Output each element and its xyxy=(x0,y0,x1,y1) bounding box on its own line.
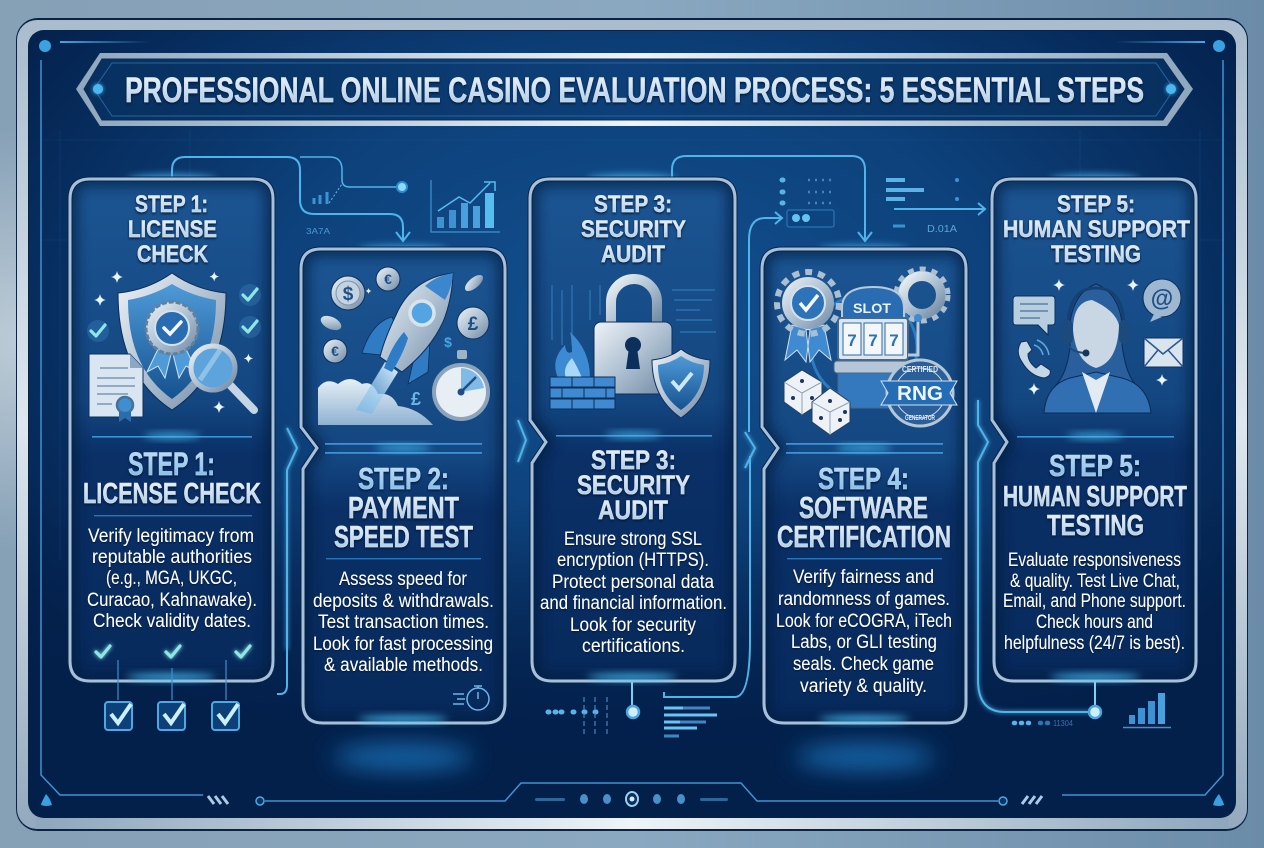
connector: step 3 to step 4 xyxy=(664,156,872,697)
heading top: SECURITY xyxy=(581,216,686,243)
card 4: software certification xyxy=(762,246,966,723)
heading bottom: STEP 1: xyxy=(128,446,215,482)
description: Protect personal data xyxy=(552,572,714,593)
heading bottom: LICENSE CHECK xyxy=(83,478,261,510)
heading top: CHECK xyxy=(137,241,209,268)
heading bottom xyxy=(1003,448,1187,542)
card 5: human support testing xyxy=(992,175,1196,681)
chart: rising bars xyxy=(431,180,500,232)
description: variety & quality. xyxy=(800,676,927,697)
description: Check validity dates. xyxy=(93,611,251,632)
heading top xyxy=(1003,191,1190,268)
description: encryption (HTTPS). xyxy=(557,550,709,571)
icon: gears, slot machine, dice and RNG seal: 7 xyxy=(868,331,878,350)
description: randomness of games. xyxy=(778,589,950,610)
card 1: license check xyxy=(70,175,273,681)
icon: three glowing checks xyxy=(96,646,250,657)
icon: gears, slot machine, dice and RNG seal: CERTIFIED xyxy=(902,365,938,374)
description xyxy=(776,567,952,697)
icon: gears, slot machine, dice and RNG seal xyxy=(777,269,957,435)
heading xyxy=(334,461,473,554)
icon: small stopwatch xyxy=(453,686,489,710)
heading bottom: HUMAN SUPPORT xyxy=(1003,481,1187,513)
heading: PAYMENT xyxy=(348,490,459,525)
description: Evaluate responsiveness xyxy=(1008,550,1181,571)
icon: support agent with chat, phone, email xyxy=(1013,279,1183,413)
heading top xyxy=(128,191,217,268)
description: seals. Check game xyxy=(793,654,934,675)
heading: STEP 4: xyxy=(818,461,909,496)
description: and financial information. xyxy=(540,593,727,614)
heading: SPEED TEST xyxy=(334,519,473,554)
heading top: LICENSE xyxy=(128,216,217,243)
heading top: STEP 5: xyxy=(1057,191,1135,218)
data dots and module xyxy=(782,180,835,227)
icon: rocket, coins and stopwatch: € xyxy=(331,343,339,359)
heading: STEP 2: xyxy=(358,461,449,496)
heading top: AUDIT xyxy=(601,241,665,268)
description: Verify fairness and xyxy=(793,567,934,588)
heading bottom: AUDIT xyxy=(598,495,668,525)
icon: gears, slot machine, dice and RNG seal: 7 xyxy=(889,331,899,350)
icon: gears, slot machine, dice and RNG seal: 7 xyxy=(847,331,857,350)
description: (e.g., MGA, UKGC, xyxy=(106,568,237,589)
icon: rocket, coins and stopwatch: $ xyxy=(343,284,354,305)
heading top: HUMAN SUPPORT xyxy=(1003,216,1190,243)
card 2: payment speed test xyxy=(301,246,505,723)
description: Look for eCOGRA, iTech xyxy=(776,611,952,632)
description: helpfulness (24/7 is best). xyxy=(1004,633,1185,654)
chevron connectors between cards xyxy=(277,400,1090,712)
icon: rocket, coins and stopwatch: € xyxy=(384,271,392,287)
node and bar chart below card 5 xyxy=(1014,682,1171,728)
heading: SOFTWARE xyxy=(799,490,928,525)
heading top: STEP 1: xyxy=(135,191,208,218)
node and bar chart below card 5: 11304 xyxy=(1053,719,1074,728)
description: Labs, or GLI testing xyxy=(791,632,937,653)
description: & quality. Test Live Chat, xyxy=(1010,571,1180,592)
description: Ensure strong SSL xyxy=(564,529,702,550)
heading top: STEP 3: xyxy=(594,191,672,218)
heading: CERTIFICATION xyxy=(777,519,951,554)
checklist below card 1 xyxy=(105,660,239,730)
card 3: security audit xyxy=(530,175,735,681)
node and data below card 3 xyxy=(548,682,717,736)
icon: gears, slot machine, dice and RNG seal: RNG xyxy=(897,383,943,405)
description: Look for fast processing xyxy=(313,634,493,655)
heading bottom: SECURITY xyxy=(577,470,690,500)
icon: gears, slot machine, dice and RNG seal: SLOT xyxy=(853,300,891,316)
description: Test transaction times. xyxy=(318,612,489,633)
icon: padlock, firewall and shield xyxy=(550,279,716,418)
description: Verify legitimacy from xyxy=(88,526,254,547)
connector: step 1 to step 2 xyxy=(172,157,410,241)
description: Check hours and xyxy=(1036,612,1153,633)
icon: rocket, coins and stopwatch xyxy=(318,267,489,425)
description: Assess speed for xyxy=(339,569,468,590)
heading bottom xyxy=(83,446,261,510)
description: Email, and Phone support. xyxy=(1003,591,1186,612)
icon: rocket, coins and stopwatch: $ xyxy=(444,334,452,350)
description xyxy=(1003,550,1186,654)
icon: shield, medal, magnifier, document xyxy=(87,271,261,422)
description xyxy=(540,529,727,657)
description: Curacao, Kahnawake). xyxy=(87,590,257,611)
heading bottom: STEP 5: xyxy=(1049,448,1141,483)
arrow and data bars to step 5: D.01A xyxy=(927,224,957,235)
description: Look for security xyxy=(570,615,696,636)
arrow and data bars to step 5 xyxy=(886,178,985,235)
description: reputable authorities xyxy=(92,547,252,568)
icon: rocket, coins and stopwatch: £ xyxy=(468,314,479,335)
description: & available methods. xyxy=(324,655,483,676)
heading xyxy=(777,461,951,554)
icon: support agent with chat, phone, email: @ xyxy=(1151,285,1173,311)
title banner xyxy=(76,53,1193,126)
heading top xyxy=(581,191,686,268)
description xyxy=(313,569,494,676)
connector: step 1 to step 2: 3A7A xyxy=(306,227,331,236)
description: deposits & withdrawals. xyxy=(313,591,494,612)
heading bottom: TESTING xyxy=(1047,510,1144,542)
icon: gears, slot machine, dice and RNG seal: GENERATOR xyxy=(905,415,935,422)
icon: rocket, coins and stopwatch: £ xyxy=(411,389,421,409)
description: certifications. xyxy=(582,636,685,657)
heading bottom xyxy=(577,445,690,525)
heading bottom: STEP 3: xyxy=(591,445,676,475)
description xyxy=(87,526,257,632)
heading top: TESTING xyxy=(1051,241,1141,268)
